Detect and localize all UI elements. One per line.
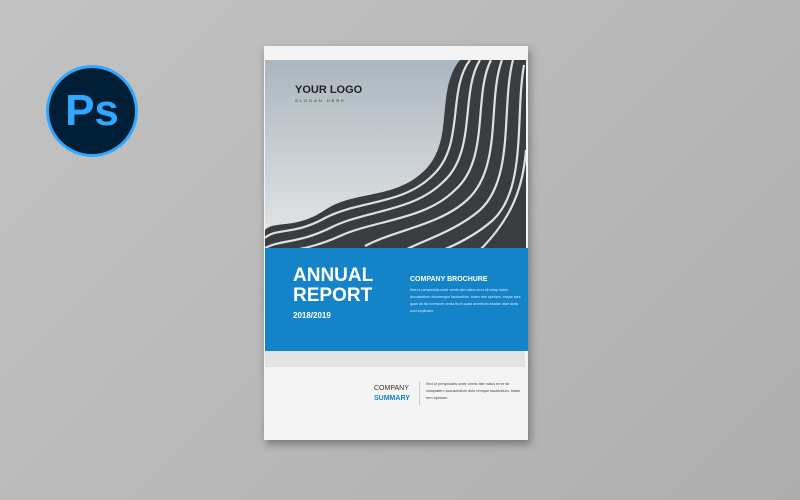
title bbox=[293, 265, 373, 306]
logo: SLOGAN HERE bbox=[295, 98, 346, 103]
gray strip bbox=[265, 351, 525, 367]
company brochure text: Sed ut perspiciatis unde omnis iste natus error sit volup totem accusantium doloremque laudantium, totam rem aperiam, eaque ipsa quae ab illo inventore verita tis et quasi architecto beatae vitae dicta sunt explicabo. bbox=[410, 288, 520, 313]
summary block: Sed ut perspiciatis unde omnis iste natus error sit voluptatem accusantium dolo remque laudantium, totam rem aperiam. bbox=[426, 382, 520, 400]
title: ANNUAL bbox=[293, 265, 373, 286]
company brochure text bbox=[410, 276, 520, 313]
brochure page bbox=[264, 46, 528, 440]
icon: photoshop logo bbox=[46, 65, 138, 157]
photo: wavy building bbox=[265, 60, 526, 248]
icon: photoshop logo: Ps bbox=[65, 86, 119, 135]
logo bbox=[295, 84, 362, 103]
blue title band bbox=[265, 248, 528, 351]
summary block bbox=[374, 381, 520, 405]
logo: YOUR LOGO bbox=[295, 84, 362, 96]
summary block: SUMMARY bbox=[374, 395, 410, 402]
year: 2018/2019 bbox=[293, 311, 331, 320]
company brochure text: COMPANY BROCHURE bbox=[410, 276, 488, 283]
summary block: COMPANY bbox=[374, 385, 409, 392]
title: REPORT bbox=[293, 285, 372, 306]
